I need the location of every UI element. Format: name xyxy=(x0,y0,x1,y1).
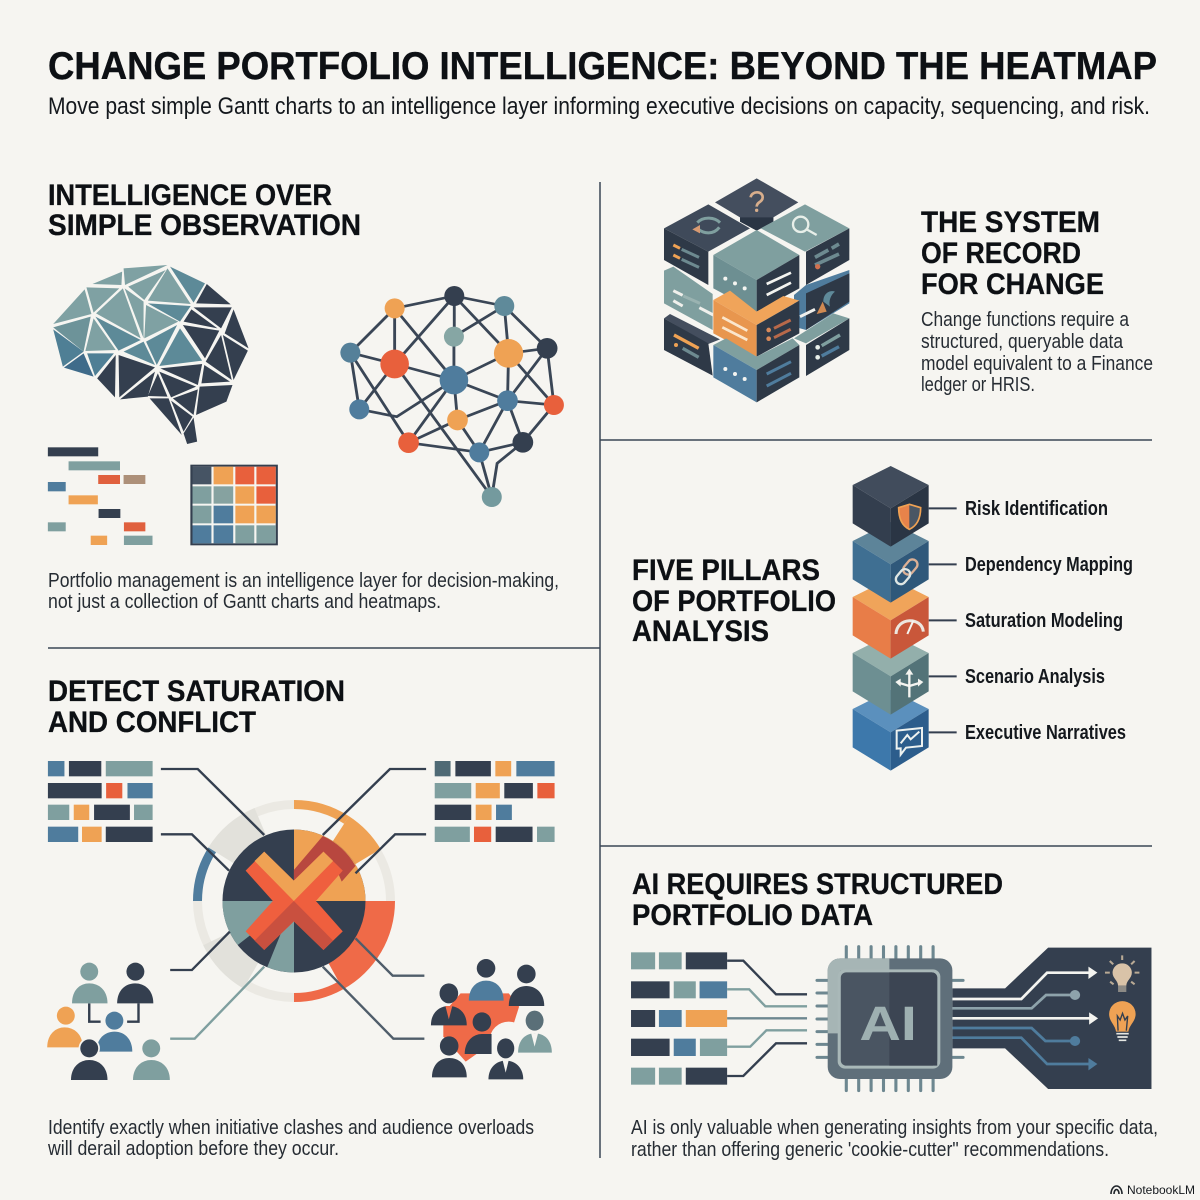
upper-right block xyxy=(761,204,849,285)
heading: ai requires structured data: PORTFOLIO DATA xyxy=(632,899,873,932)
heading: detect saturation xyxy=(48,675,345,739)
middle-left block xyxy=(664,267,713,330)
icon: dim lightbulb xyxy=(1105,955,1139,992)
heading: intelligence over simple observation: INTELLIGENCE OVER xyxy=(48,179,332,212)
lower-right block xyxy=(794,313,849,376)
panel: five pillars xyxy=(632,466,1133,771)
upper-left block xyxy=(664,204,750,285)
label: scenario analysis: Scenario Analysis xyxy=(965,666,1105,688)
text: intelligence description: not just a collection of Gantt charts and heatmaps. xyxy=(48,591,441,613)
icon: overloaded audience xyxy=(431,959,552,1079)
label: saturation modeling: Saturation Modeling xyxy=(965,610,1123,632)
heading: ai requires structured data: AI REQUIRES STRUCTURED xyxy=(632,868,1003,901)
panel: ai requires structured data xyxy=(631,868,1158,1161)
text: ai description xyxy=(631,1117,1158,1161)
heading: system of record xyxy=(921,206,1104,301)
text: saturation description: will derail adoption before they occur. xyxy=(47,1138,339,1160)
chart: heatmap xyxy=(190,465,278,545)
footer: NotebookLM mark: NotebookLM xyxy=(1127,1183,1195,1197)
icon: output circuit panel xyxy=(952,948,1151,1089)
centre top block xyxy=(713,230,799,312)
chart: right initiative bars xyxy=(435,761,555,842)
pillar block: risk identification xyxy=(853,466,929,547)
icon: AI chip xyxy=(817,947,963,1091)
bottom blue block xyxy=(713,338,799,402)
label: executive narratives: Executive Narratives xyxy=(965,722,1126,744)
icon: AI chip: AI xyxy=(859,997,917,1051)
icon: isometric data cube xyxy=(664,178,849,402)
heading: system of record: FOR CHANGE xyxy=(921,268,1104,301)
title: CHANGE PORTFOLIO INTELLIGENCE: BEYOND THE HEATMAP xyxy=(48,45,1157,88)
text: system of record description: model equivalent to a Finance xyxy=(921,353,1153,375)
text: system of record description: ledger or HRIS. xyxy=(921,374,1035,396)
text: saturation description xyxy=(47,1117,534,1160)
text: intelligence description: Portfolio management is an intelligence layer for decision-making, xyxy=(48,570,559,592)
icon: lit lightbulb xyxy=(1109,1001,1136,1040)
panel: intelligence over simple observation xyxy=(48,179,564,613)
heading: five pillars: OF PORTFOLIO xyxy=(632,585,836,618)
heading: system of record: THE SYSTEM xyxy=(921,206,1100,239)
pillar block: saturation modeling xyxy=(853,578,929,659)
heading: ai requires structured data xyxy=(632,868,1003,932)
icon: connected team xyxy=(47,963,170,1080)
heading: five pillars xyxy=(632,554,836,648)
text: ai description: rather than offering generic 'cookie-cutter" recommendations. xyxy=(631,1139,1109,1161)
lower-left block xyxy=(664,314,720,376)
chart: network brain xyxy=(340,286,564,507)
middle-right block xyxy=(794,270,849,330)
panel: detect saturation and conflict xyxy=(47,675,555,1160)
chart: left initiative bars xyxy=(48,761,153,842)
label: risk identification: Risk Identification xyxy=(965,498,1108,520)
pillar block: executive narratives xyxy=(853,690,929,771)
heading: five pillars: ANALYSIS xyxy=(632,615,769,648)
orange block xyxy=(713,291,799,357)
chart: conflict ring with X xyxy=(161,769,426,1039)
text: system of record description: Change functions require a xyxy=(921,309,1130,331)
heading: intelligence over simple observation xyxy=(48,179,361,242)
heading: intelligence over simple observation: SIMPLE OBSERVATION xyxy=(48,209,361,242)
heading: system of record: OF RECORD xyxy=(921,237,1081,270)
heading: detect saturation: AND CONFLICT xyxy=(48,706,256,739)
text: intelligence description xyxy=(48,570,559,613)
text: saturation description: Identify exactly when initiative clashes and audience overloads xyxy=(48,1117,534,1139)
chart: gantt bars xyxy=(48,447,152,545)
text: system of record description: structured, queryable data xyxy=(921,331,1124,353)
panel: system of record xyxy=(664,178,1153,402)
icon: polygon brain xyxy=(53,265,249,444)
heading: five pillars: FIVE PILLARS xyxy=(632,554,820,587)
label: dependency mapping: Dependency Mapping xyxy=(965,554,1133,576)
text: system of record description xyxy=(921,309,1153,396)
pillar block: scenario analysis xyxy=(853,634,929,715)
chart: pillar stack xyxy=(853,466,957,771)
heading: detect saturation: DETECT SATURATION xyxy=(48,675,345,708)
chart: data bars and feed lines xyxy=(631,952,807,1085)
pillar block: dependency mapping xyxy=(853,522,929,603)
